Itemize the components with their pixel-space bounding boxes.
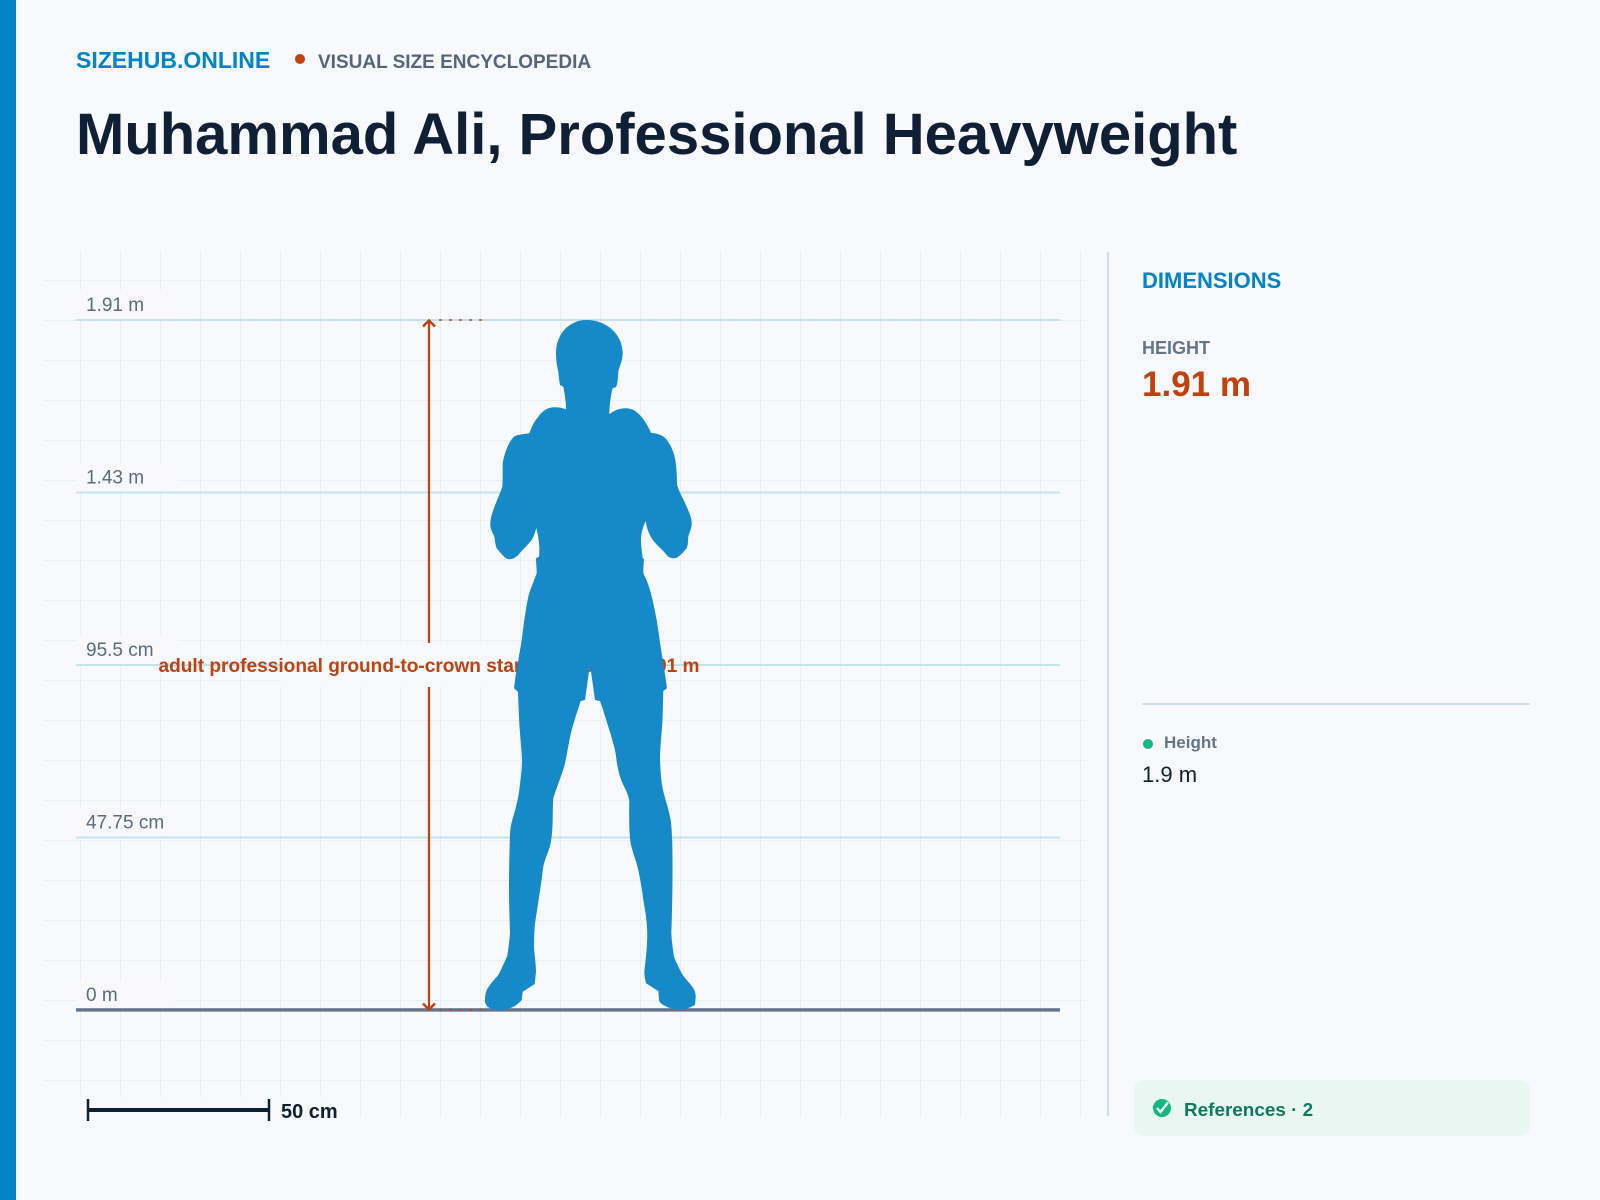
panel: dimensions: [1107, 252, 1530, 1136]
axis label: 0 m: 0 m: [86, 985, 118, 1006]
source item: height: Height: [1164, 733, 1217, 752]
title: Muhammad Ali, Professional Heavyweight: [76, 102, 1237, 167]
left accent bar: [0, 0, 16, 1200]
height value: 1.91 m: [1142, 365, 1251, 404]
axis label: 1.43 m: 1.43 m: [86, 468, 144, 488]
panel heading: DIMENSIONS: [1142, 268, 1281, 293]
axis label: 1.91 m: [76, 290, 178, 319]
axis label: 0 m: [76, 980, 175, 1008]
axis label: 47.75 cm: [76, 808, 178, 836]
background grid: [44, 252, 1088, 1116]
ground line: [76, 1008, 1060, 1012]
axis label: 95.5 cm: 95.5 cm: [86, 640, 154, 661]
header: [76, 47, 1237, 167]
height label: HEIGHT: [1142, 338, 1210, 358]
references badge: [1134, 1080, 1530, 1136]
level lines: [76, 320, 1060, 838]
source item: height: [1142, 733, 1217, 787]
axis label: 1.91 m: 1.91 m: [86, 295, 144, 316]
header dot: [295, 54, 305, 64]
axis label: 1.43 m: [76, 462, 178, 492]
silhouette: boxer: [485, 320, 696, 1010]
panel divider: [1107, 252, 1109, 1116]
axis label: 95.5 cm: [76, 635, 178, 664]
arrow callout: [158, 643, 700, 687]
chart: height comparison: [44, 252, 1088, 1123]
brand name: SIZEHUB.ONLINE: [76, 47, 270, 73]
source item: height: 1.9 m: [1142, 762, 1197, 787]
axis label: 47.75 cm: 47.75 cm: [86, 812, 164, 834]
scale label: 50 cm: [281, 1101, 338, 1123]
tagline: VISUAL SIZE ENCYCLOPEDIA: [318, 52, 591, 73]
arrow callout: adult professional ground-to-crown standing height: 1.91 m: [158, 656, 700, 677]
scale bar backdrop: [76, 1097, 345, 1116]
icon: check circle: [1153, 1099, 1171, 1117]
references badge: References · 2: [1184, 1100, 1313, 1121]
dimension arrow: [423, 320, 483, 1010]
